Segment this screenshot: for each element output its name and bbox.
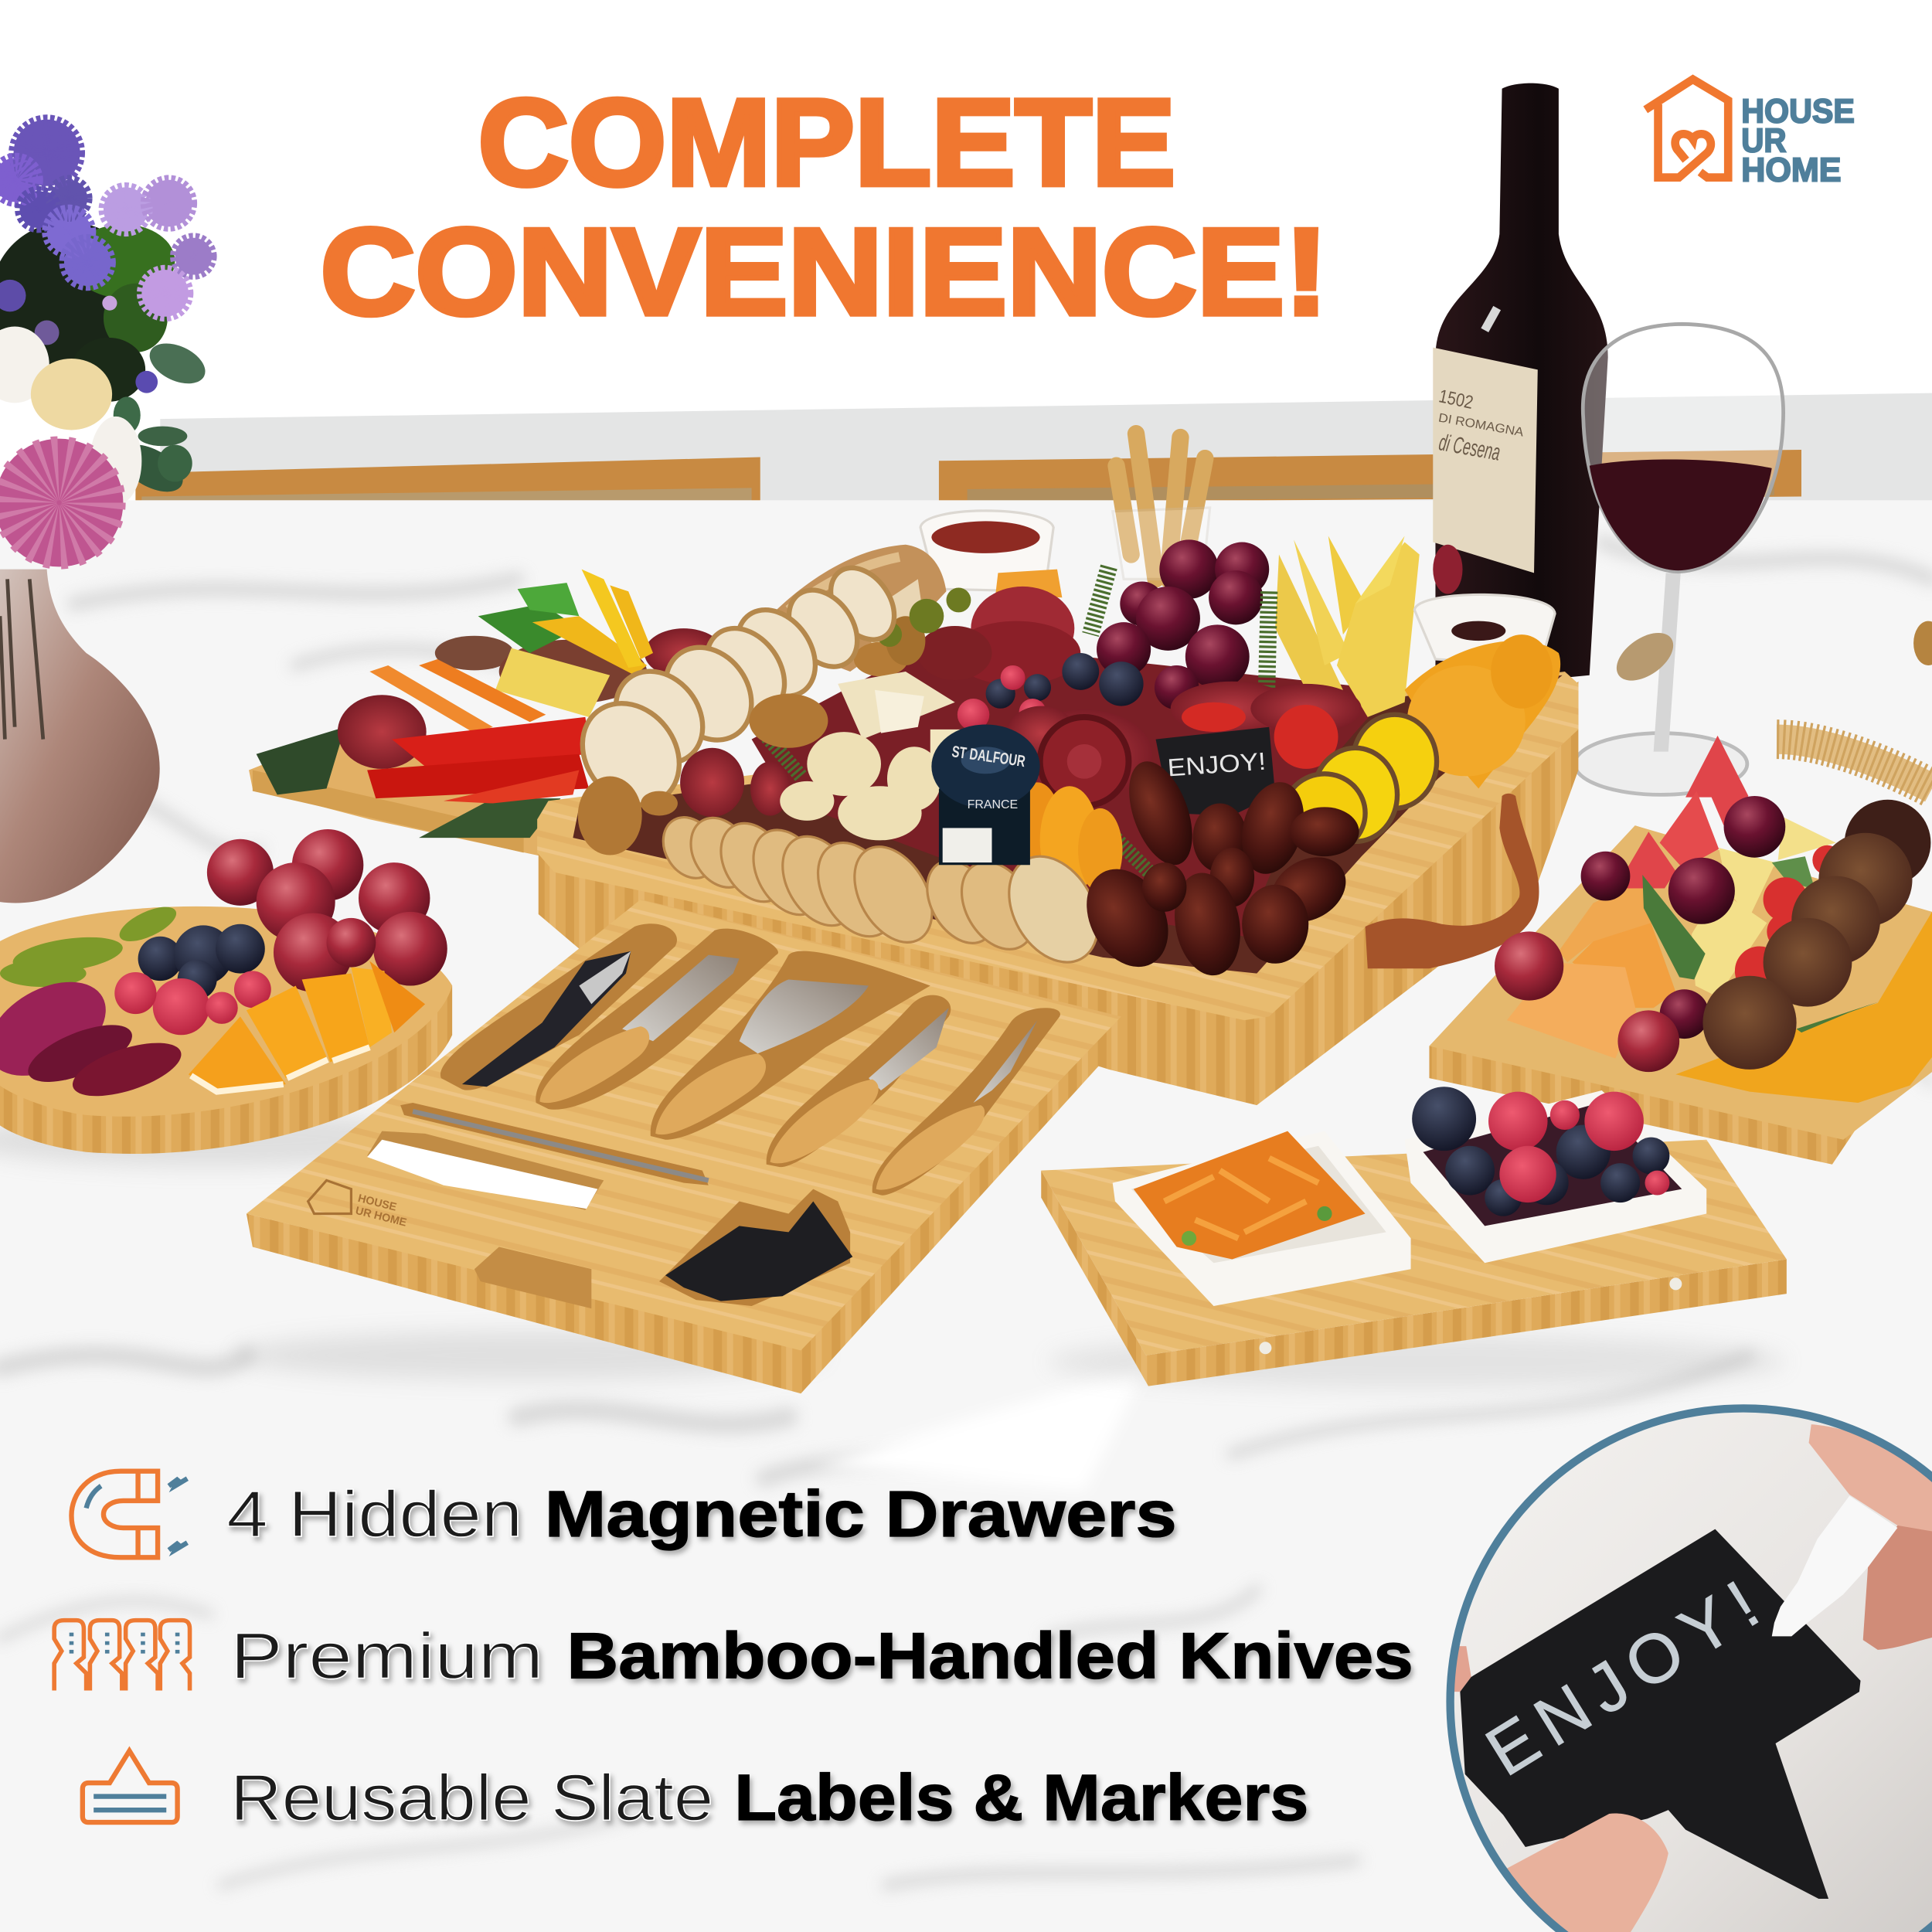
figs bbox=[1702, 800, 1930, 1070]
leaf bbox=[1642, 875, 1706, 980]
left fingertip bbox=[1454, 1646, 1471, 1692]
wood edge right bbox=[1913, 621, 1932, 665]
finger: right bbox=[1863, 1526, 1932, 1650]
slate label bbox=[1460, 1529, 1861, 1899]
salami bbox=[971, 587, 1074, 670]
bowl: berries bbox=[1405, 1087, 1706, 1263]
finger: bottom bbox=[1503, 1814, 1668, 1932]
chair: right bbox=[939, 450, 1801, 503]
bowl: carrots bbox=[1113, 1131, 1411, 1306]
side faces bbox=[539, 682, 1578, 1105]
bottle label text: di Cesena bbox=[1437, 430, 1502, 466]
walnuts top bbox=[854, 616, 925, 676]
feature 1 text: 4 Hidden bbox=[226, 1478, 522, 1550]
yellow pepper bbox=[532, 616, 647, 675]
yellow discs bbox=[1284, 715, 1437, 852]
bottle label text: DI ROMAGNA bbox=[1437, 411, 1525, 440]
green pepper bbox=[478, 604, 579, 653]
bright marble patch bbox=[813, 1368, 1146, 1491]
feature 2 text: Bamboo-Handled Knives bbox=[566, 1620, 1413, 1692]
icon: knives bbox=[54, 1621, 190, 1691]
dried mango bbox=[1405, 634, 1560, 788]
marker slot bbox=[367, 1131, 604, 1210]
logo: wordmark: HOUSE bbox=[1741, 94, 1855, 131]
apricots bbox=[1013, 782, 1122, 895]
logo: wordmark: UR bbox=[1741, 122, 1787, 159]
salami under bbox=[680, 682, 1362, 817]
main board body bbox=[537, 434, 1578, 1105]
glass bbox=[1113, 508, 1210, 579]
grapes bbox=[1495, 796, 1785, 1072]
thumb notch bbox=[474, 1247, 591, 1308]
cheese bbox=[495, 648, 610, 717]
bottle label text: 1502 bbox=[1437, 386, 1475, 413]
white and cream flowers bbox=[0, 327, 141, 505]
grapes bbox=[207, 829, 447, 992]
wheat bbox=[1777, 740, 1932, 788]
logo: wordmark: HOME bbox=[1741, 152, 1842, 189]
jam jar bbox=[931, 725, 1040, 865]
pink flower bbox=[0, 439, 123, 566]
marble table bbox=[0, 500, 1932, 1932]
engraved logo: UR HOME bbox=[354, 1205, 408, 1230]
wine glass bbox=[1575, 324, 1784, 794]
engraved logo: HOUSE bbox=[356, 1192, 398, 1214]
strawberries bbox=[1735, 845, 1842, 995]
parmesan chunks bbox=[780, 730, 972, 840]
food bbox=[563, 434, 1560, 981]
board: back-left vegetables bbox=[249, 570, 723, 856]
grapes bbox=[1097, 539, 1269, 709]
walnuts bbox=[578, 694, 828, 855]
corkscrew slot bbox=[440, 923, 677, 1090]
tray with bowls bbox=[1041, 1087, 1787, 1389]
logo: wordmark bbox=[1741, 94, 1855, 189]
slate tag in board: ENJOY! bbox=[1166, 747, 1267, 781]
fork slot bbox=[400, 1103, 709, 1185]
slate slot bbox=[659, 1189, 852, 1306]
orange cheese bbox=[995, 570, 1062, 597]
engraved logo bbox=[308, 1180, 408, 1230]
chair: left bbox=[135, 457, 760, 509]
knife slot 4 bbox=[767, 995, 951, 1167]
cheese tool drawer bbox=[234, 900, 1121, 1393]
purple flowers bbox=[0, 120, 212, 393]
olives bbox=[877, 588, 971, 647]
blackberries bbox=[138, 924, 265, 999]
berries bbox=[957, 653, 1144, 730]
bread loaf bbox=[770, 545, 946, 672]
sauce cup bbox=[920, 511, 1053, 591]
watermelon bbox=[1615, 736, 1748, 889]
feature 3 text: Reusable Slate bbox=[230, 1761, 713, 1834]
finger: top right bbox=[1809, 1424, 1932, 1532]
breadsticks bbox=[1117, 434, 1205, 579]
marble veins bbox=[0, 543, 1932, 1885]
knife slot 2 bbox=[536, 929, 778, 1110]
feature list bbox=[54, 1471, 1413, 1834]
slate tag in board bbox=[1156, 727, 1275, 815]
logo: house icon bbox=[1645, 80, 1728, 178]
title line 2: CONVENIENCE! bbox=[321, 203, 1328, 341]
cork bbox=[1608, 623, 1682, 690]
salami rose bbox=[1040, 717, 1128, 806]
rosemary bbox=[764, 566, 1269, 875]
knife slot 5 bbox=[872, 1008, 1060, 1196]
plate shadow bbox=[0, 1113, 456, 1167]
carrots bbox=[369, 665, 493, 733]
marker bbox=[1772, 1496, 1897, 1636]
mango bbox=[1675, 912, 1932, 1103]
feature 2 text: Premium bbox=[230, 1620, 543, 1692]
bottle label bbox=[1433, 348, 1538, 573]
feature 3 text: Labels & Markers bbox=[734, 1761, 1308, 1834]
jam jar: ST DALFOUR bbox=[951, 743, 1026, 770]
oranges bbox=[189, 961, 425, 1094]
logo bbox=[1645, 80, 1855, 189]
back wall band bbox=[160, 393, 1932, 510]
knife slot 3 bbox=[651, 951, 930, 1140]
brie bbox=[838, 672, 955, 740]
icon: magnet bbox=[71, 1471, 187, 1557]
bread slices bbox=[563, 556, 907, 824]
pineapple bbox=[1692, 817, 1836, 997]
icon: slate label bbox=[83, 1751, 178, 1822]
dragonfruit bbox=[0, 963, 187, 1107]
plate: round left bbox=[0, 829, 456, 1167]
drawer faces bbox=[247, 1016, 1121, 1393]
cheese wedges bbox=[1275, 536, 1420, 717]
vase bbox=[0, 570, 160, 903]
melon bbox=[1507, 879, 1675, 1059]
drawer top bbox=[247, 900, 1121, 1350]
vase with flowers bbox=[0, 120, 212, 903]
feature 1 text: Magnetic Drawers bbox=[545, 1478, 1177, 1550]
inset: writing on slate label bbox=[1451, 1408, 1932, 1932]
jam jar: FRANCE bbox=[968, 798, 1018, 811]
flower greenery bbox=[0, 222, 212, 502]
small cup bbox=[1414, 594, 1555, 665]
handle: leather strap bbox=[1366, 794, 1539, 968]
red peppers bbox=[392, 717, 591, 767]
dates bbox=[1070, 753, 1359, 981]
meat base bbox=[752, 641, 1393, 937]
kiwi bbox=[0, 900, 181, 987]
bottle label text bbox=[1437, 386, 1525, 466]
strawberries bbox=[1182, 702, 1338, 769]
raspberries bbox=[114, 971, 271, 1035]
crackers bbox=[653, 807, 1116, 978]
recess bbox=[573, 675, 1563, 974]
wine bottle bbox=[1433, 83, 1608, 690]
meat, leaves bbox=[257, 727, 345, 794]
rim bbox=[537, 672, 1578, 1020]
title line 1: COMPLETE bbox=[478, 73, 1175, 211]
title bbox=[321, 73, 1328, 341]
plate: fruit right bbox=[1429, 736, 1932, 1165]
handwritten enjoy: ENJOY! bbox=[1473, 1566, 1771, 1791]
